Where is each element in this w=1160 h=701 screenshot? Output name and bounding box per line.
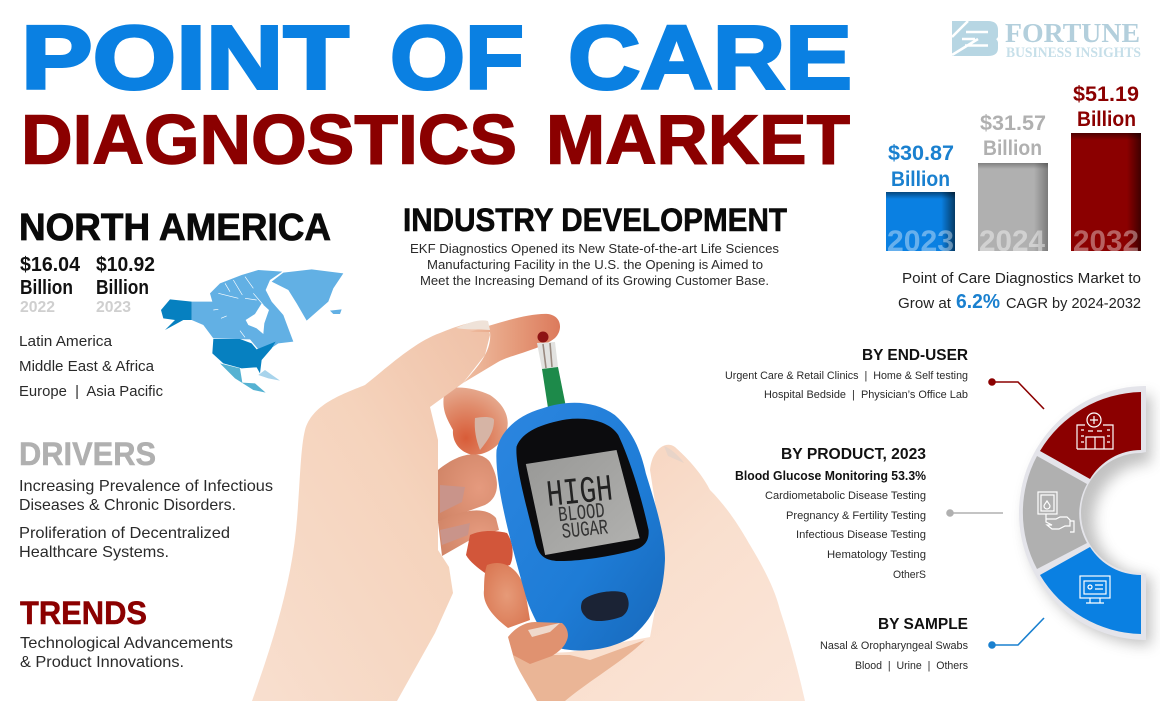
title: point of care: CARE [568,8,852,108]
cagr text [898,270,1141,313]
title: diagnostics market [21,100,850,178]
text: industry development body: Meet the Increasing Demand of its Growing Customer Base. [420,273,769,288]
segment: product [1023,456,1087,569]
text: industry development body [410,241,779,288]
text: drivers list: Proliferation of Decentralized [19,525,230,542]
glucose meter [496,403,665,651]
cagr text: Point of Care Diagnostics Market to [902,270,1141,287]
section: by sample: Blood | Urine | Others [855,660,968,672]
text: drivers list: Healthcare Systems. [19,544,169,561]
stat: 2022: 2022 [20,299,55,316]
section: by end-user [725,347,968,401]
title: diagnostics market: DIAGNOSTICS [21,100,517,178]
bar 2023: $30.87 [888,142,954,165]
bar chart: market size [886,83,1141,258]
text: drivers list: Diseases & Chronic Disorders. [19,497,236,514]
stat: 2022: Billion [20,277,73,299]
connector: end-user [989,379,1044,409]
region list: Europe | Asia Pacific [19,383,163,400]
section: by end-user: BY END-USER [862,347,968,364]
section: by product: Infectious Disease Testing [796,529,926,541]
section: by product [735,446,926,581]
text: industry development body: Manufacturing Facility in the U.S. the Opening is Aimed to [427,257,763,272]
bar 2024: 2024 [979,225,1045,258]
bar 2023: 2023 [887,225,954,258]
stat: 2023 [96,254,155,316]
heading: drivers: DRIVERS [19,436,156,472]
region list [19,333,163,400]
title: point of care: OF [390,8,524,108]
region list: Latin America [19,333,113,350]
section: by end-user: Urgent Care & Retail Clinics | Home & Self testing [725,370,968,382]
meter screen: BLOOD [557,499,606,528]
stat: 2022: $16.04 [20,254,81,276]
test strip [537,332,566,408]
text: trends list: Technological Advancements [20,635,233,652]
segment: sample [1040,547,1141,634]
bar 2024: $31.57 [980,112,1046,135]
section: by product: Pregnancy & Fertility Testing [786,510,926,522]
meter screen [516,419,649,561]
cagr text: Grow at [898,295,952,312]
semicircle segment diagram [1019,386,1151,645]
section: by sample: BY SAMPLE [878,616,968,633]
heading: trends: TRENDS [20,595,147,631]
left hand palm and thumb [252,314,560,701]
meter button [581,591,629,621]
heading: industry development: INDUSTRY DEVELOPMENT [403,202,787,238]
photo: hands holding glucose meter [252,314,805,701]
text: trends list: & Product Innovations. [20,654,184,671]
bar 2032: 2032 [1073,225,1139,258]
title: point of care [21,8,852,108]
bar 2024: Billion [983,137,1042,160]
right hand [466,445,805,701]
section: by product: Cardiometabolic Disease Testing [765,490,926,502]
bar 2023: Billion [891,168,950,191]
meter screen: SUGAR [560,516,609,545]
section: by product: Blood Glucose Monitoring 53.3% [735,469,926,483]
segment: end-user [1040,392,1141,479]
text: trends list [20,635,233,671]
section: by product: Hematology Testing [827,549,926,561]
meter screen: HIGH [545,469,615,518]
section: by product: BY PRODUCT, 2023 [781,446,926,463]
logo: fortune business insights [952,18,1141,61]
left hand fingers [438,388,508,556]
connector: product [947,510,1003,516]
title: point of care: POINT [21,8,349,108]
section: by sample [820,616,968,672]
region list: Middle East & Africa [19,358,155,375]
logo: fortune business insights: BUSINESS INSIGHTS [1006,45,1141,61]
stat: 2023: Billion [96,277,149,299]
front finger [508,622,568,664]
logo: fortune business insights: FORTUNE [1005,18,1140,48]
title: diagnostics market: MARKET [546,100,850,178]
map: north america [161,269,343,393]
text: drivers list: Increasing Prevalence of Infectious [19,478,273,495]
bar 2032: $51.19 [1073,83,1139,106]
section: by sample: Nasal & Oropharyngeal Swabs [820,640,968,652]
bar 2032: Billion [1077,108,1136,131]
cagr text: CAGR by 2024-2032 [1006,295,1141,312]
stat: 2023: 2023 [96,299,131,316]
text: industry development body: EKF Diagnostics Opened its New State-of-the-art Life Sciences [410,241,779,256]
section: by end-user: Hospital Bedside | Physician’s Office Lab [764,389,968,401]
section: by product: OtherS [893,569,926,581]
bar 2024 [978,112,1048,258]
cagr text: 6.2% [956,291,1000,313]
bar 2032 [1071,83,1141,258]
bar 2023 [886,142,955,258]
heading: north america: NORTH AMERICA [19,207,331,249]
connector: sample [989,618,1044,648]
stat: 2023: $10.92 [96,254,155,276]
text: drivers list [19,478,273,561]
stat: 2022 [20,254,81,316]
